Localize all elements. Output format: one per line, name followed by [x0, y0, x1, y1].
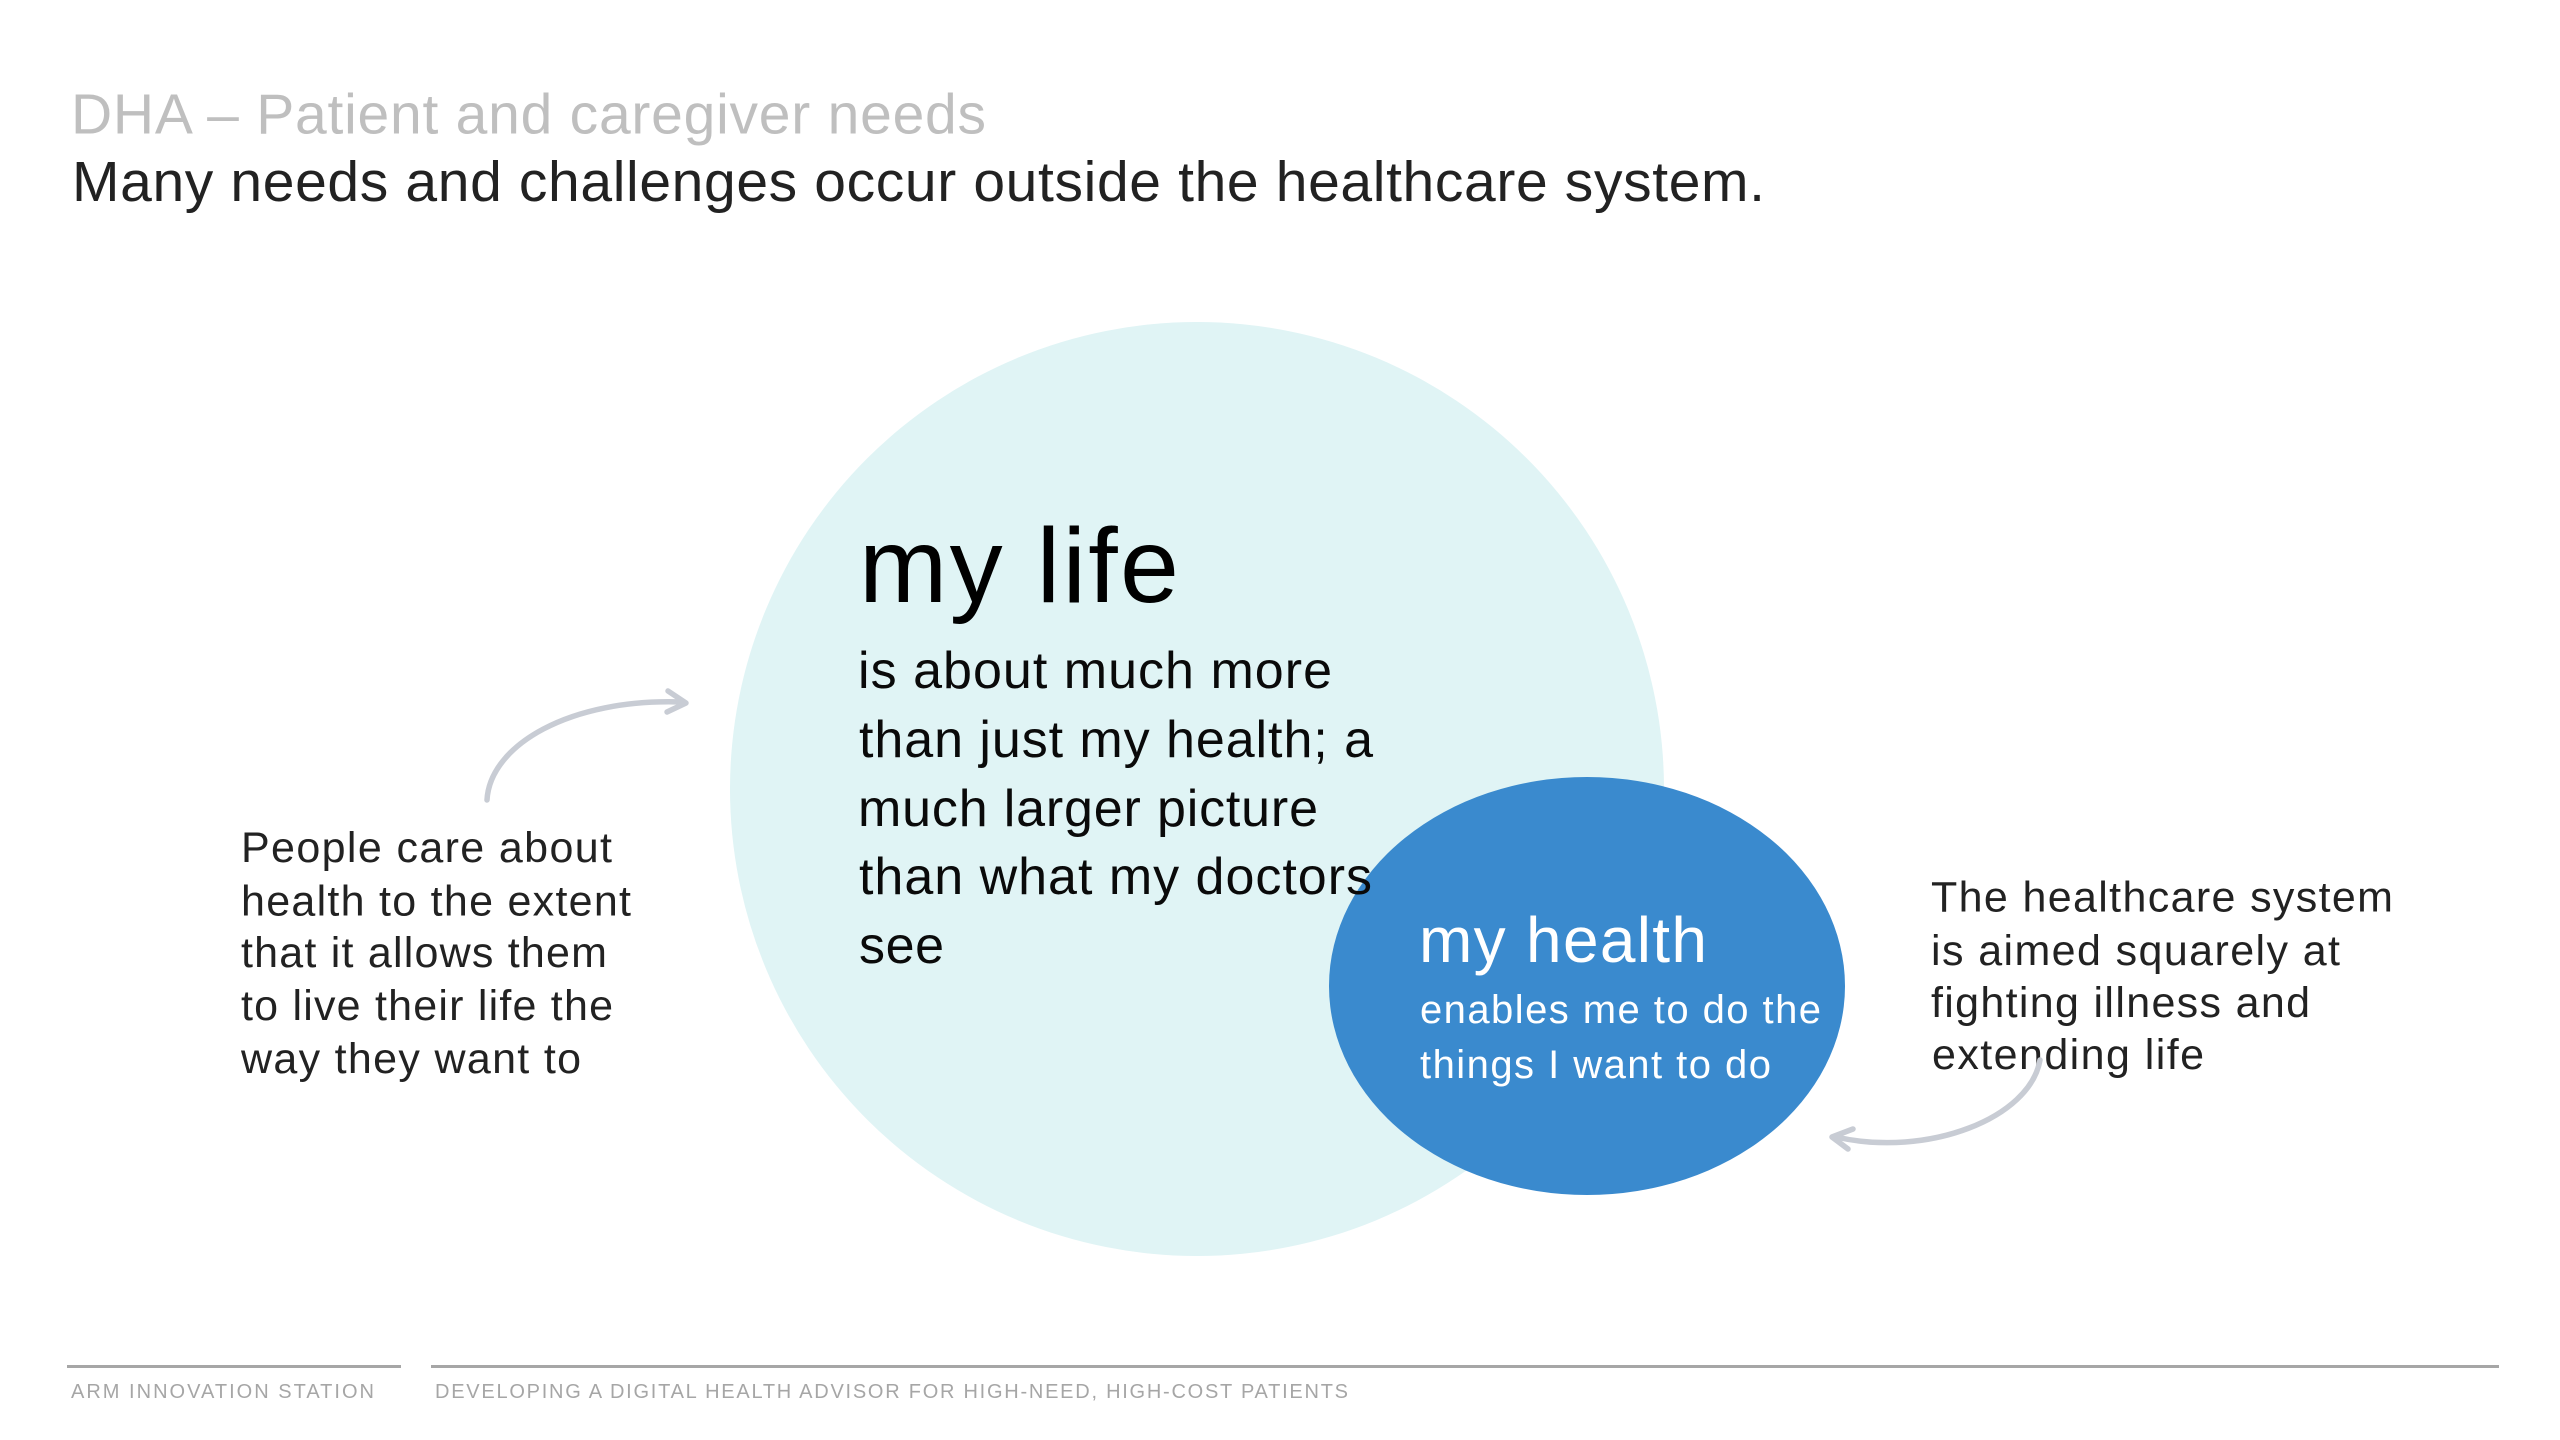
callout: healthcare system: fighting illness and — [1931, 979, 2310, 1027]
callout: people care about health: health to the extent — [241, 878, 631, 926]
callout: people care about health: to live their life the — [241, 982, 613, 1030]
footer label right: DEVELOPING A DIGITAL HEALTH ADVISOR FOR HIGH-NEED, HIGH-COST PATIENTS — [435, 1381, 1348, 1403]
title block — [71, 82, 1765, 214]
panel: my life circle — [730, 322, 1664, 1256]
callout: people care about health: way they want to — [240, 1035, 581, 1083]
footer rule left — [67, 1365, 401, 1368]
arrow: left callout to my life — [487, 691, 686, 800]
body: my life description: is about much more — [858, 642, 1332, 700]
callout: people care about health: that it allows them — [241, 929, 607, 977]
subtitle: Many needs and challenges occur outside the healthcare system. — [72, 150, 1765, 214]
body: my life description: than just my health; a — [859, 711, 1373, 769]
footer label left: ARM INNOVATION STATION — [71, 1381, 374, 1403]
arrow: right callout to my health — [1832, 1060, 2040, 1149]
heading: my life: my life — [859, 507, 1179, 625]
body: my life description: than what my doctors — [859, 848, 1372, 906]
callout: people care about health — [240, 824, 631, 1083]
panel: my health ellipse — [1329, 777, 1845, 1195]
text: my life — [858, 507, 1373, 975]
body: my life description: see — [859, 917, 944, 975]
footer — [67, 1365, 2499, 1403]
heading: my health: my health — [1419, 904, 1707, 976]
callout: people care about health: People care about — [241, 824, 612, 872]
body: my health description: enables me to do the — [1420, 988, 1821, 1032]
text: my health — [1419, 904, 1821, 1087]
section heading: DHA – Patient and caregiver needs — [71, 82, 986, 146]
body: my health description — [1420, 988, 1821, 1087]
callout: healthcare system — [1931, 874, 2393, 1079]
callout: healthcare system: extending life — [1932, 1031, 2204, 1079]
callout: healthcare system: The healthcare system — [1931, 874, 2393, 922]
body: my life description — [858, 642, 1373, 975]
body: my health description: things I want to do — [1420, 1043, 1771, 1087]
footer rule right — [431, 1365, 2499, 1368]
callout: healthcare system: is aimed squarely at — [1931, 927, 2340, 975]
body: my life description: much larger picture — [858, 780, 1318, 838]
